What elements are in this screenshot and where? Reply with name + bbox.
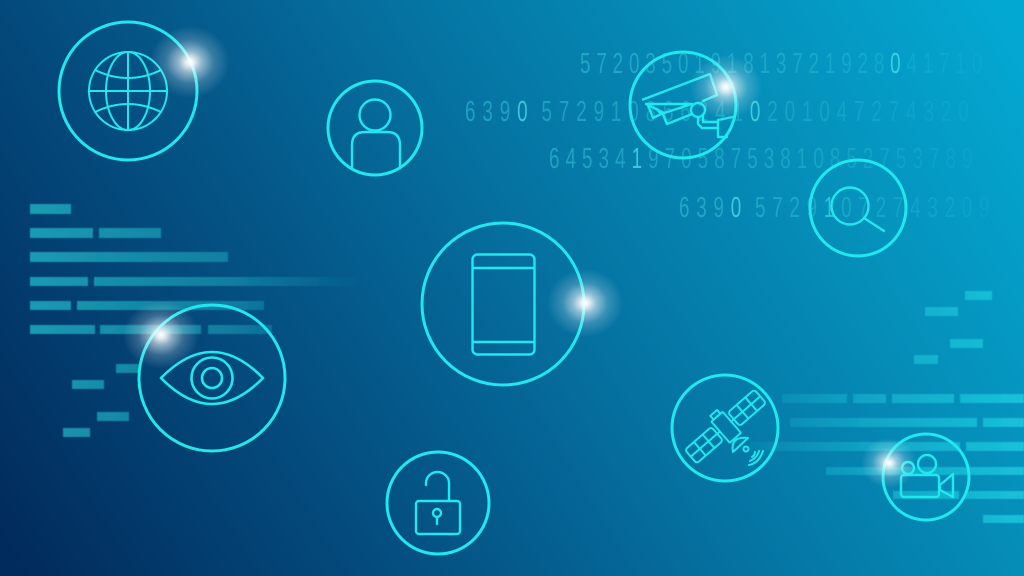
icon: security camera [630, 52, 736, 158]
light flare: globe [150, 26, 230, 98]
binary number rows [465, 48, 996, 224]
icon: globe [59, 22, 197, 160]
number row 2: 63905729108662410201047274320 [465, 96, 976, 128]
light flare: smartphone [547, 269, 623, 337]
icon: person [328, 81, 422, 175]
number row 3: 64534197058753810852753789 [549, 143, 979, 175]
number row 4: 639057291072743209 [679, 192, 996, 224]
data bars: left block [30, 204, 360, 437]
data bars: right block [750, 291, 1024, 523]
icon: open padlock [387, 452, 489, 554]
light flare: security camera [690, 55, 762, 119]
icon: eye [139, 305, 285, 451]
number row 1: 5720350191813721928041710 [580, 48, 988, 80]
icon: smartphone [422, 223, 584, 385]
icon: video camera [883, 434, 969, 520]
light flare: eye [123, 301, 199, 369]
icon: magnifying glass [810, 160, 906, 256]
light flare: video camera [861, 438, 917, 488]
icon: satellite [672, 375, 778, 481]
